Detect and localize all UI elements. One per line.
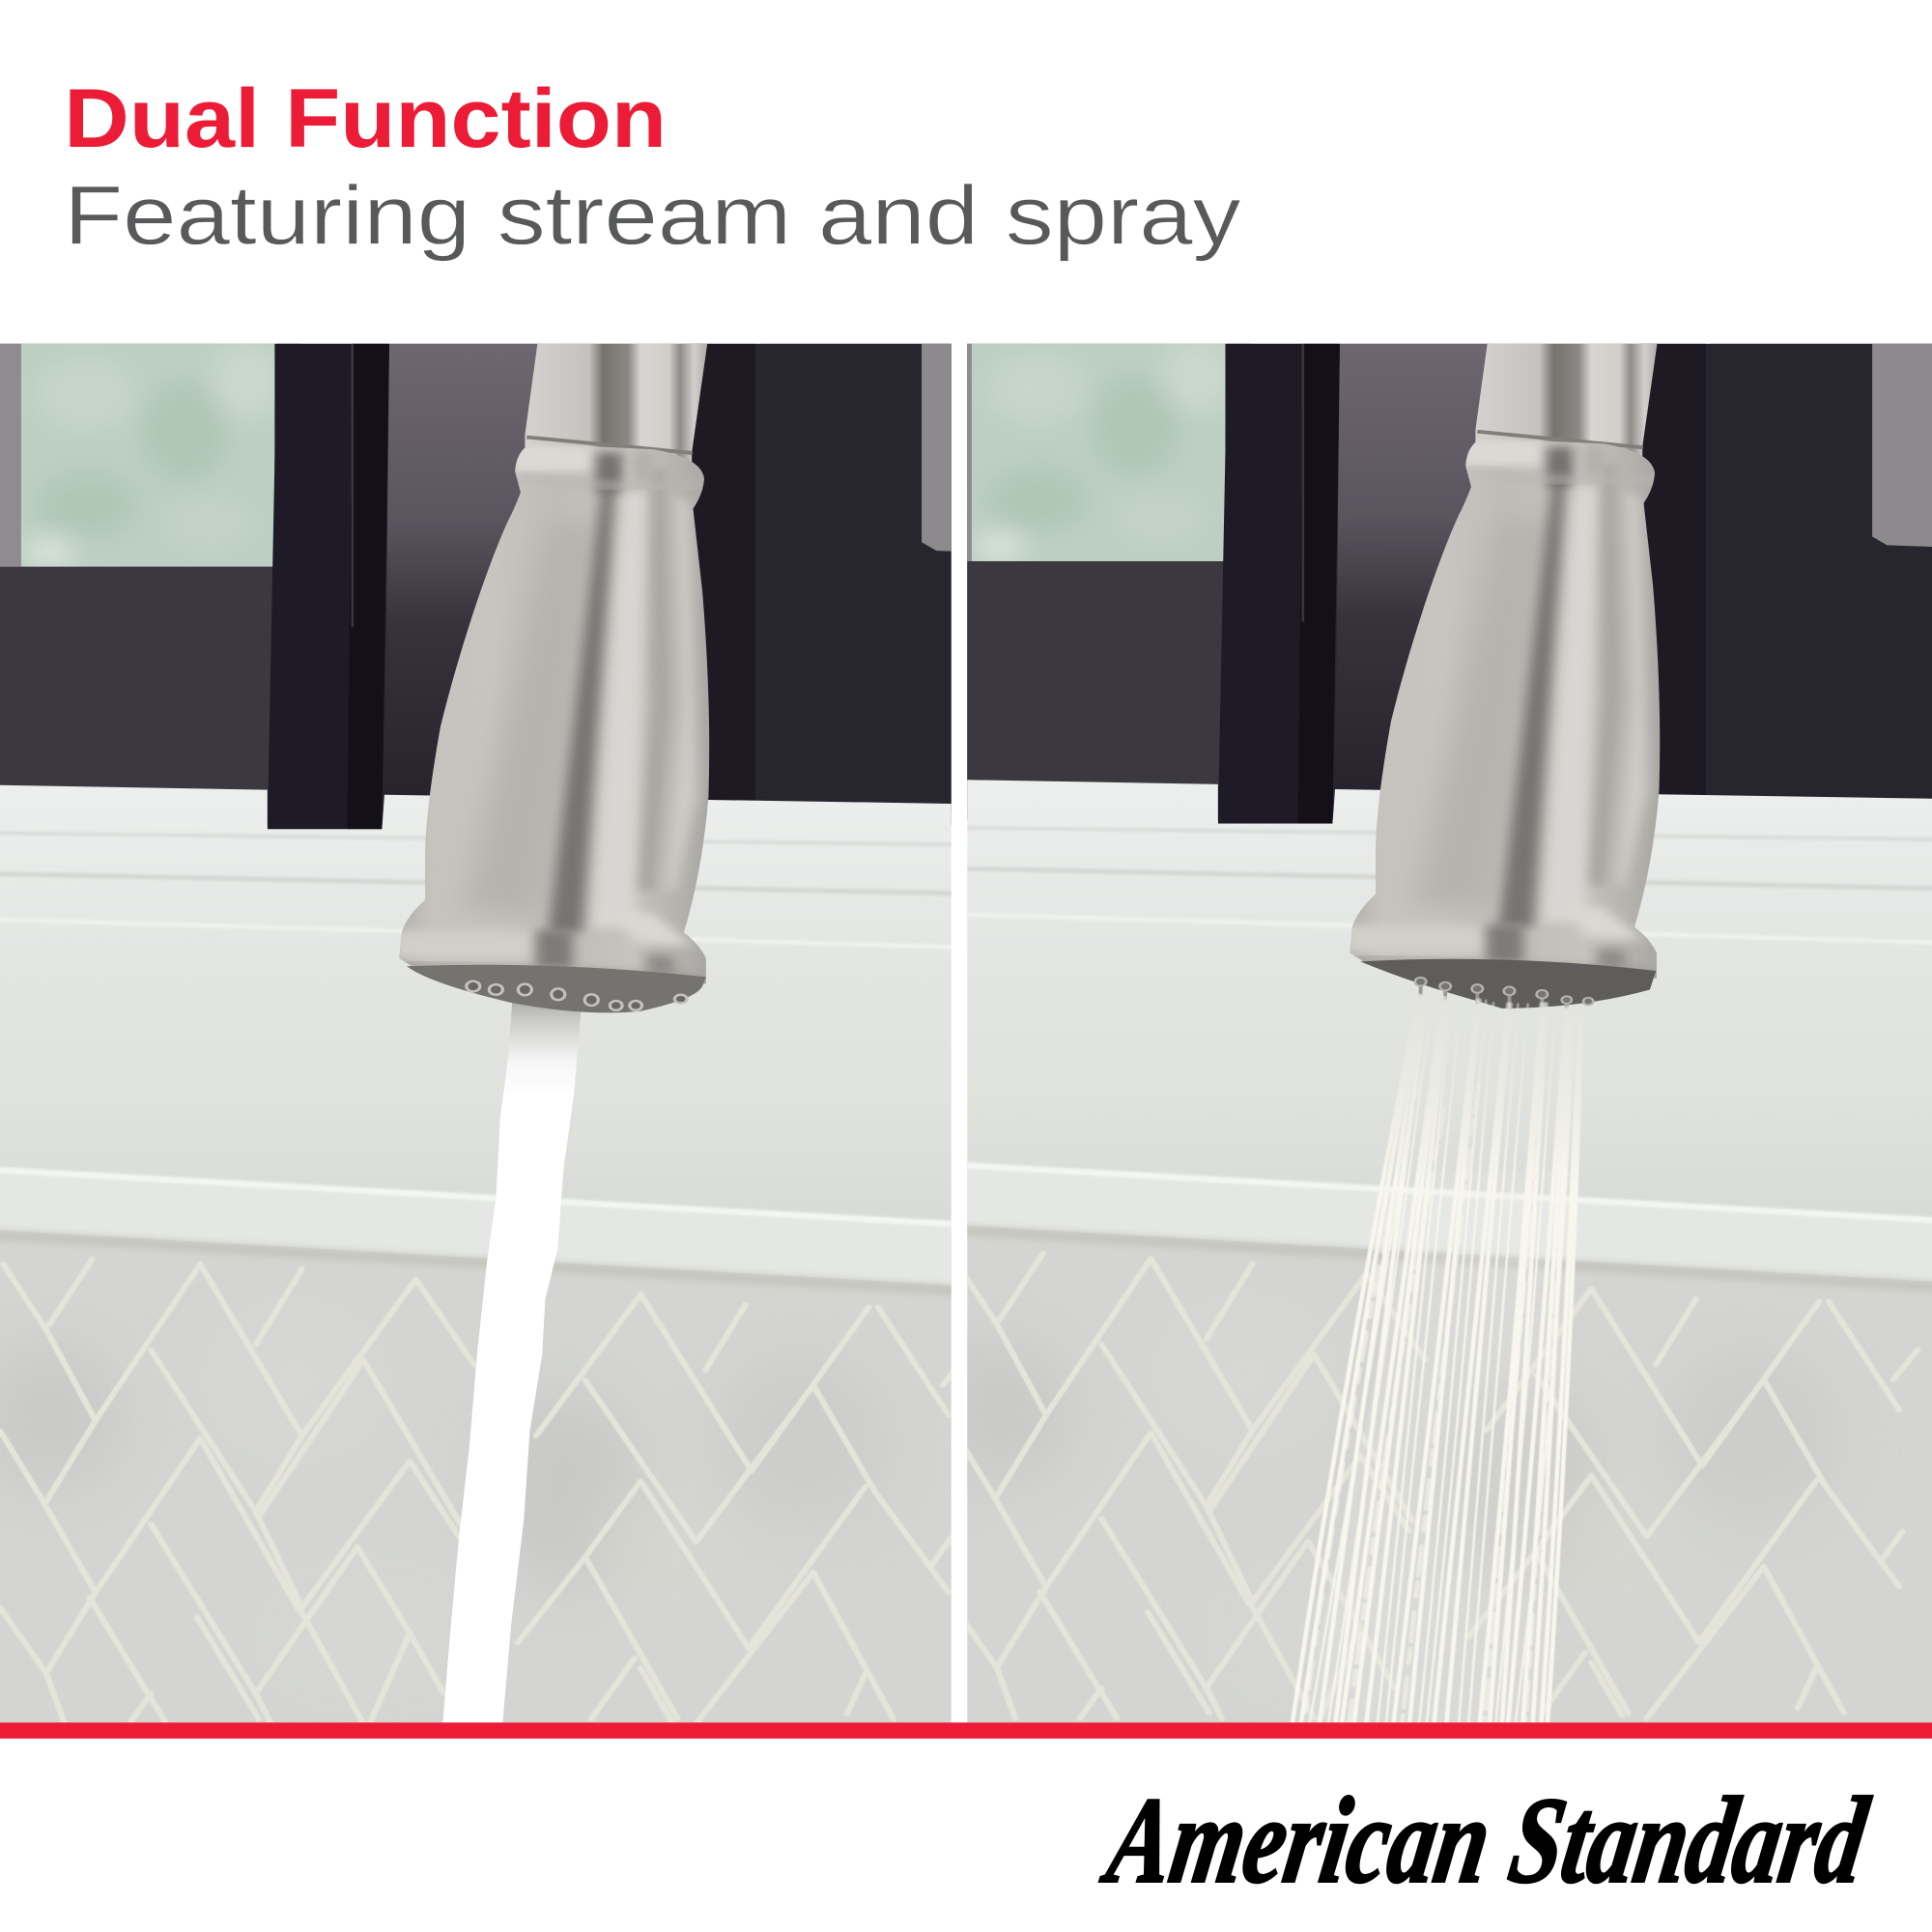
red divider bar bbox=[0, 1722, 1932, 1739]
panel: stream mode photo bbox=[0, 310, 1010, 1749]
faucet spray face with nozzles bbox=[1360, 959, 1656, 1009]
faucet head bbox=[1345, 304, 1662, 979]
faucet spray face bbox=[407, 965, 706, 1012]
water spray jets bbox=[1293, 996, 1582, 1722]
panel: spray mode photo bbox=[926, 304, 1932, 1744]
kitchen window, ledge and tile backdrop bbox=[926, 327, 1932, 1744]
title: Dual Function bbox=[64, 71, 667, 165]
faucet head bbox=[394, 310, 712, 984]
kitchen window, ledge and tile backdrop bbox=[0, 332, 1010, 1749]
subtitle: Featuring stream and spray bbox=[64, 169, 1241, 263]
water stream bbox=[442, 996, 582, 1729]
